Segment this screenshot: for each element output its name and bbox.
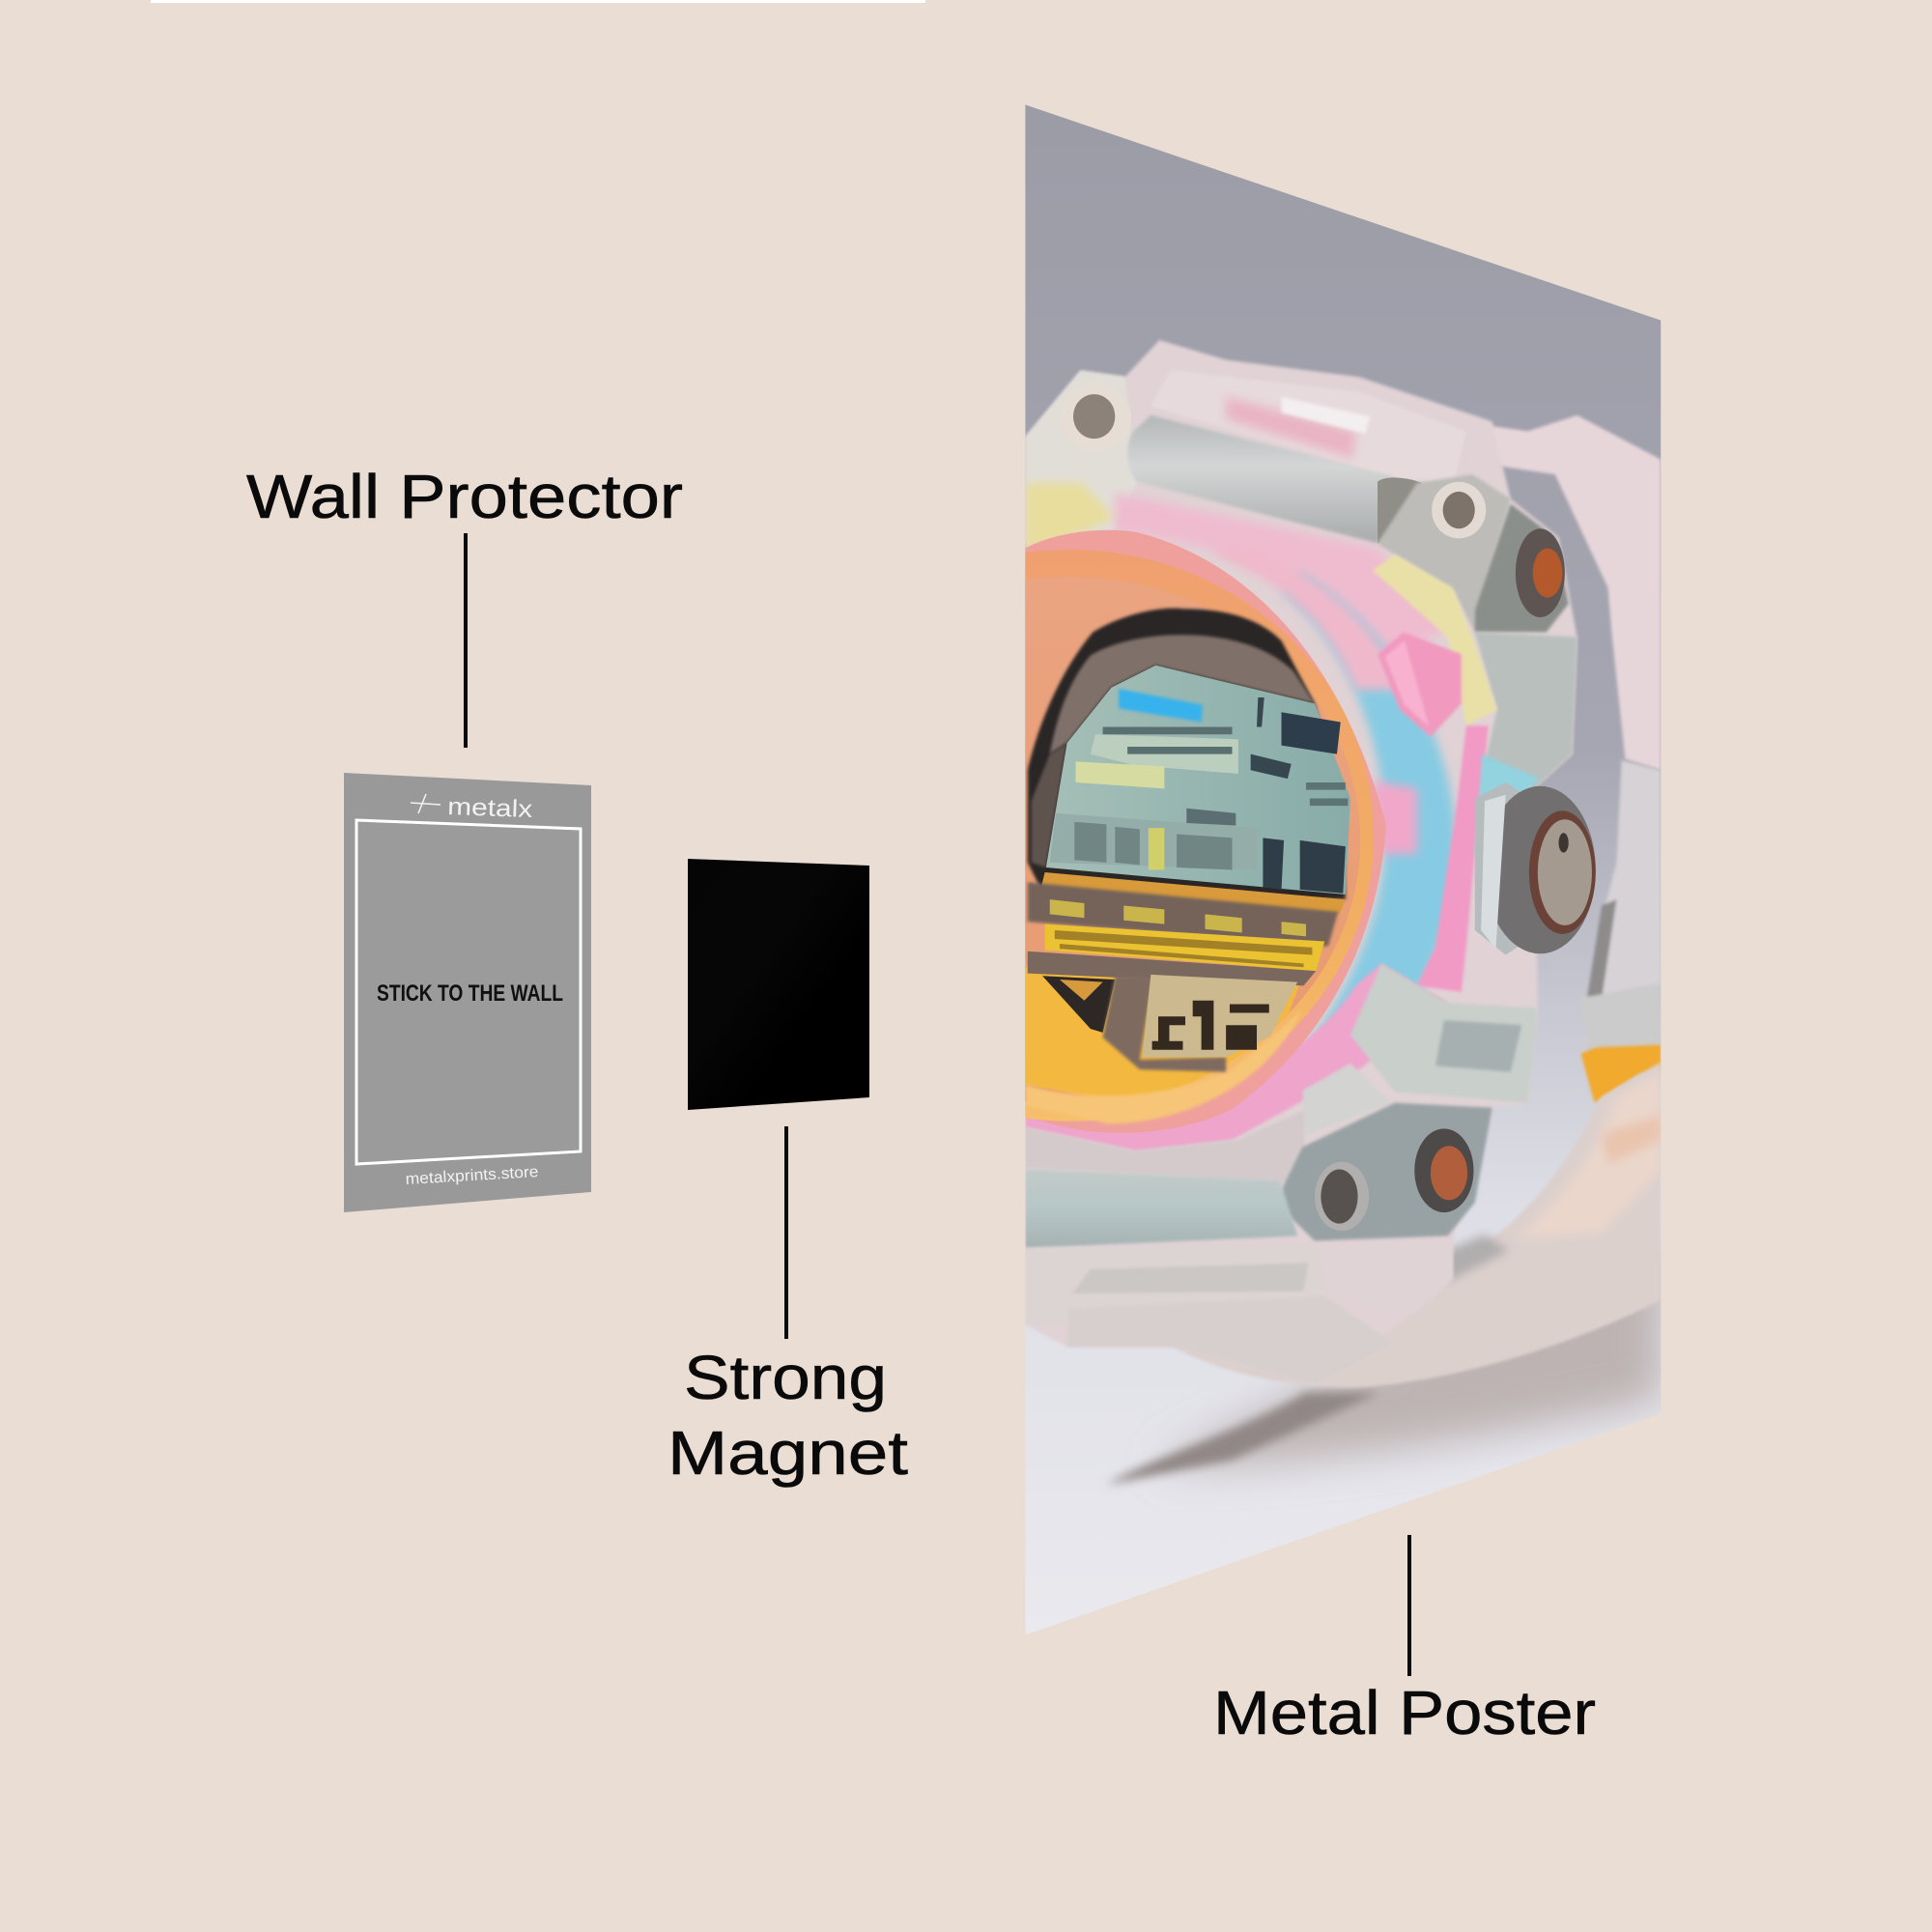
silver cylinder: [1127, 415, 1395, 543]
main orange ring: [1025, 529, 1386, 1133]
lower strap: [1171, 1062, 1661, 1387]
lower right lug: [1275, 1064, 1492, 1240]
case base: [1025, 340, 1577, 1385]
wall protector sheet: [344, 773, 591, 1212]
pink vertical stripe: [1417, 725, 1489, 992]
metal poster: [1025, 104, 1662, 1634]
upper translucent band: [1225, 394, 1373, 456]
white frame: [356, 820, 581, 1164]
label: strong magnet: [668, 1126, 908, 1488]
orange piece: [1580, 1045, 1661, 1103]
left brown tiles: [1032, 743, 1067, 867]
crown: [1475, 782, 1596, 955]
pink band below cylinder: [1112, 491, 1441, 646]
gold strip: [1041, 872, 1346, 914]
bottom copper bolt: [1414, 1128, 1474, 1212]
pink lower ring: [1025, 963, 1448, 1151]
lower translucent block: [1350, 963, 1537, 1103]
label: wall protector: Wall Protector: [246, 462, 683, 531]
label: wall protector: [246, 462, 683, 748]
label: strong magnet: Strong: [684, 1343, 887, 1412]
brown tile block: [1103, 976, 1226, 1072]
hole upper left: [1072, 394, 1130, 439]
right clear lugs and bracket: [1580, 760, 1661, 1054]
textured brown panel: [1050, 635, 1315, 754]
hole upper right: [1432, 482, 1486, 538]
top white strip: [151, 0, 925, 3]
bottom yellow crescent: [1025, 967, 1306, 1101]
label: metal poster: Metal Poster: [1213, 1678, 1596, 1747]
logo mark: [411, 794, 440, 813]
yellow text band: [1045, 924, 1324, 971]
label: strong magnet: Magnet: [668, 1418, 908, 1488]
top right lug: [1378, 474, 1569, 632]
brown tile row: [1028, 882, 1338, 947]
magnet: [688, 859, 869, 1110]
upper left corner: [1025, 371, 1137, 542]
case under ring: [1025, 1109, 1306, 1182]
pink button: [1378, 632, 1462, 737]
logo text: metalx: [447, 793, 533, 823]
blue indicator: [1119, 689, 1203, 722]
bottom clear case: [1025, 1240, 1453, 1385]
tan lower digit panel: [1142, 975, 1297, 1057]
yellow translucent piece: [1373, 554, 1497, 725]
pale block right of button: [1475, 632, 1577, 788]
back strap upper right: [1485, 415, 1661, 770]
lcd screen: [1046, 666, 1350, 895]
shadow on table: [1106, 1244, 1661, 1485]
copper bolt upper: [1516, 528, 1565, 617]
bottom hole: [1315, 1162, 1369, 1231]
bottom silver cylinder: [1025, 1169, 1297, 1248]
lower brown strip: [1028, 952, 1316, 985]
watch bezel: [1028, 609, 1346, 899]
website text: metalxprints.store: [405, 1163, 539, 1188]
stick to the wall text: STICK TO THE WALL: [377, 980, 563, 1007]
label: metal poster: [1213, 1535, 1596, 1747]
dark triangle: [1042, 976, 1115, 1033]
blue ring: [1282, 573, 1456, 1047]
